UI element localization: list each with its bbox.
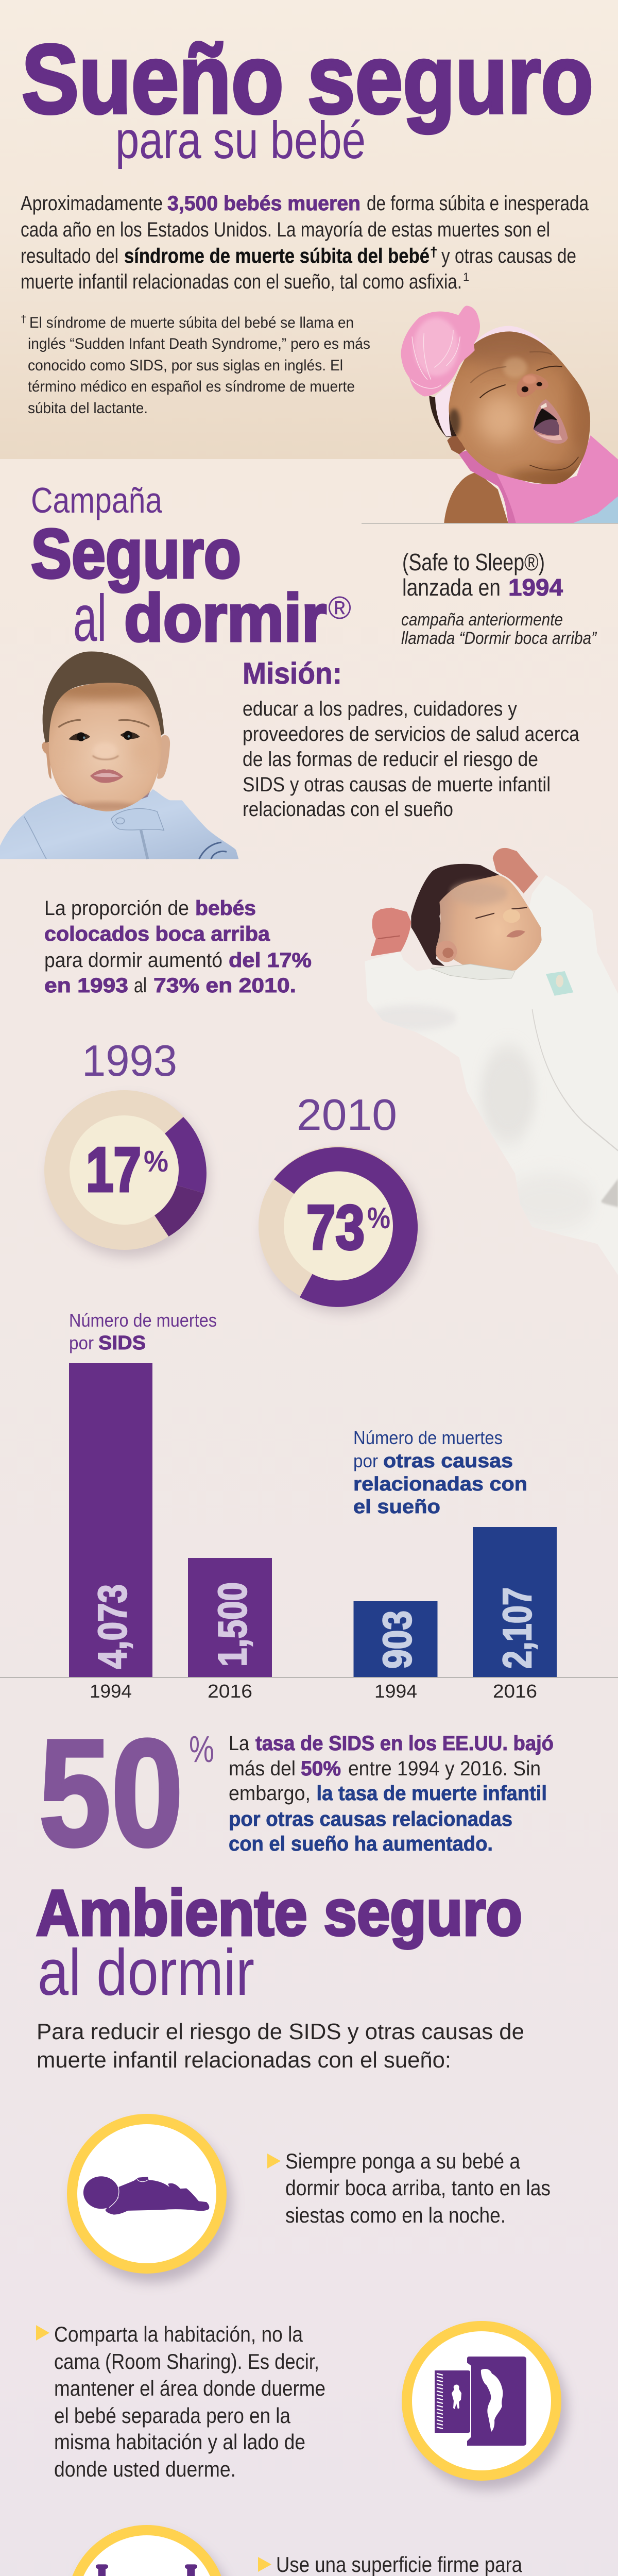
stat description: con el sueño ha aumentado. (229, 1833, 493, 1855)
stat description (229, 1732, 554, 1855)
intro text: † (430, 244, 437, 260)
photo: smiling baby in blue (0, 652, 238, 859)
intro text: 1 (463, 270, 469, 283)
bar chart: SIDS deaths: 4,073 (90, 1584, 135, 1669)
bar chart: SIDS deaths: Número de muertes (69, 1310, 217, 1331)
tip 1: siestas como en la noche. (285, 2203, 506, 2227)
tip 2: cama (Room Sharing). Es decir, (54, 2349, 319, 2374)
photo: sleeping baby in white (365, 848, 618, 1275)
back-sleeping proportion text: colocados boca arriba (44, 923, 270, 945)
tip 2: el bebé separada pero en la (54, 2403, 291, 2428)
back-sleeping proportion text: bebés (195, 897, 256, 920)
bar chart: other sleep-related deaths: 2016 (493, 1681, 537, 1702)
tip 2: Comparta la habitación, no la (54, 2322, 303, 2346)
bar chart: other sleep-related deaths: otras causas (383, 1450, 513, 1472)
heading: Campaña Seguro al dormir: Campaña (31, 480, 162, 520)
heading: Ambiente seguro al dormir (36, 1877, 522, 2009)
back-sleeping proportion text: 73% en 2010. (153, 974, 296, 997)
bar chart: other sleep-related deaths: por (353, 1450, 378, 1471)
donut chart: 2010, 73%: 2010 (297, 1091, 397, 1140)
donut chart: 1993, 17%: 1993 (82, 1037, 177, 1086)
back-sleeping proportion text: en 1993 (44, 974, 128, 997)
bar chart: other sleep-related deaths: 1994 (374, 1681, 417, 1702)
footnote: SIDS term: término médico en español es síndrome de muerte (28, 378, 355, 395)
tip 2 (36, 2322, 325, 2481)
bar chart: SIDS deaths: 1994 (90, 1681, 132, 1702)
title: para su bebé (115, 111, 366, 170)
photo: yawning baby with pink flower (401, 306, 618, 523)
bar chart: other sleep-related deaths: Número de muertes (353, 1427, 503, 1448)
back-sleeping proportion text: La proporción de (44, 897, 189, 920)
intro text: resultado del (21, 245, 118, 267)
tip 2: donde usted duerme. (54, 2457, 236, 2481)
bar chart: other sleep-related deaths: relacionadas con (353, 1473, 527, 1495)
icon: crib (67, 2525, 232, 2576)
bar chart: SIDS deaths (69, 1310, 272, 1702)
heading: Ambiente seguro al dormir: Ambiente seguro (36, 1877, 522, 1949)
donut chart: 1993, 17%: % (144, 1145, 168, 1178)
stat description: La (229, 1732, 250, 1755)
donut chart: 2010, 73%: 73 (306, 1192, 365, 1262)
bar chart: other sleep-related deaths: 903 (374, 1611, 420, 1669)
footnote: SIDS term: súbita del lactante. (28, 400, 148, 417)
stat description: entre 1994 y 2016. Sin (348, 1757, 541, 1780)
bar chart: SIDS deaths: SIDS (98, 1332, 146, 1354)
back-sleeping proportion text: para dormir aumentó (44, 949, 222, 972)
stat description: la tasa de muerte infantil (316, 1782, 547, 1805)
stat description: 50% (301, 1757, 341, 1780)
footnote: SIDS term: conocido como SIDS, por sus siglas en inglés. El (28, 357, 343, 374)
mission: Misión: (243, 657, 342, 690)
divider under photo (362, 523, 618, 524)
footnote: SIDS term (21, 314, 370, 417)
bar chart: SIDS deaths: por (69, 1332, 94, 1353)
back-sleeping proportion text: al (134, 974, 147, 997)
campaign details: 1994 (508, 574, 563, 601)
bar chart: SIDS deaths: 1,500 (210, 1582, 255, 1667)
campaign details: llamada “Dormir boca arriba” (401, 629, 597, 648)
tip 1 (267, 2149, 551, 2227)
section intro: Para reducir el riesgo de SIDS y otras causas de (37, 2019, 524, 2044)
footnote: SIDS term: El síndrome de muerte súbita del bebé se llama en (29, 314, 354, 331)
donut chart: 1993, 17% (44, 1037, 209, 1257)
bar chart: other sleep-related deaths: el sueño (353, 1496, 440, 1518)
donut chart: 2010, 73% (259, 1091, 423, 1313)
campaign details: campaña anteriormente (401, 610, 563, 630)
stat description: por otras causas relacionadas (229, 1808, 512, 1831)
intro text: muerte infantil relacionadas con el sueño, tal como asfixia. (21, 270, 462, 293)
donut chart: 2010, 73%: % (367, 1201, 390, 1235)
back-sleeping proportion text: del 17% (229, 949, 312, 972)
heading: Campaña Seguro al dormir: ® (328, 590, 351, 626)
mission (243, 657, 580, 821)
donut chart: 1993, 17%: 17 (86, 1134, 141, 1205)
bar chart: other sleep-related deaths: 2,107 (494, 1587, 540, 1669)
tip 2: mantener el área donde duerme (54, 2376, 325, 2400)
intro text: 3,500 bebés mueren (167, 192, 360, 215)
back-sleeping proportion text (44, 897, 312, 997)
campaign details (401, 549, 597, 648)
bar chart: other sleep-related deaths (353, 1427, 557, 1702)
heading: Campaña Seguro al dormir: dormir (124, 580, 327, 655)
heading: Campaña Seguro al dormir (31, 480, 351, 655)
tip 1: Siempre ponga a su bebé a (285, 2149, 521, 2173)
footnote: SIDS term: inglés “Sudden Infant Death Syndrome,” pero es más (28, 335, 370, 352)
mission: de las formas de reducir el riesgo de (243, 748, 538, 771)
icon: room sharing (402, 2321, 567, 2490)
mission: relacionadas con el sueño (243, 798, 453, 821)
tip 2: misma habitación y al lado de (54, 2430, 305, 2454)
chart baseline (0, 1677, 618, 1678)
stat description: tasa de SIDS en los EE.UU. bajó (255, 1732, 554, 1755)
footnote: SIDS term: † (21, 314, 26, 325)
stat description: embargo, (229, 1782, 311, 1805)
heading: Campaña Seguro al dormir: Seguro (31, 515, 241, 592)
mission: SIDS y otras causas de muerte infantil (243, 773, 551, 796)
section intro: muerte infantil relacionadas con el sueño: (37, 2047, 451, 2073)
stat description: más del (229, 1757, 296, 1780)
heading: Ambiente seguro al dormir: al dormir (38, 1936, 254, 2009)
heading: Campaña Seguro al dormir: al (73, 582, 107, 655)
intro text: Aproximadamente (21, 192, 163, 215)
bar chart: SIDS deaths: 2016 (208, 1681, 252, 1702)
stat: 50%: % (189, 1729, 214, 1770)
campaign details: (Safe to Sleep®) (402, 549, 545, 575)
icon: baby on back (67, 2114, 232, 2283)
mission: educar a los padres, cuidadores y (243, 698, 517, 720)
mission: proveedores de servicios de salud acerca (243, 723, 580, 745)
section intro (37, 2019, 524, 2073)
tip 1: dormir boca arriba, tanto en las (285, 2176, 551, 2200)
intro text (21, 192, 589, 293)
tip 3: Use una superficie firme para (276, 2552, 523, 2576)
stat: 50%: 50 (39, 1707, 183, 1878)
intro text: y otras causas de (441, 245, 576, 267)
intro text: síndrome de muerte súbita del bebé (124, 245, 430, 267)
campaign details: lanzada en (402, 574, 501, 601)
